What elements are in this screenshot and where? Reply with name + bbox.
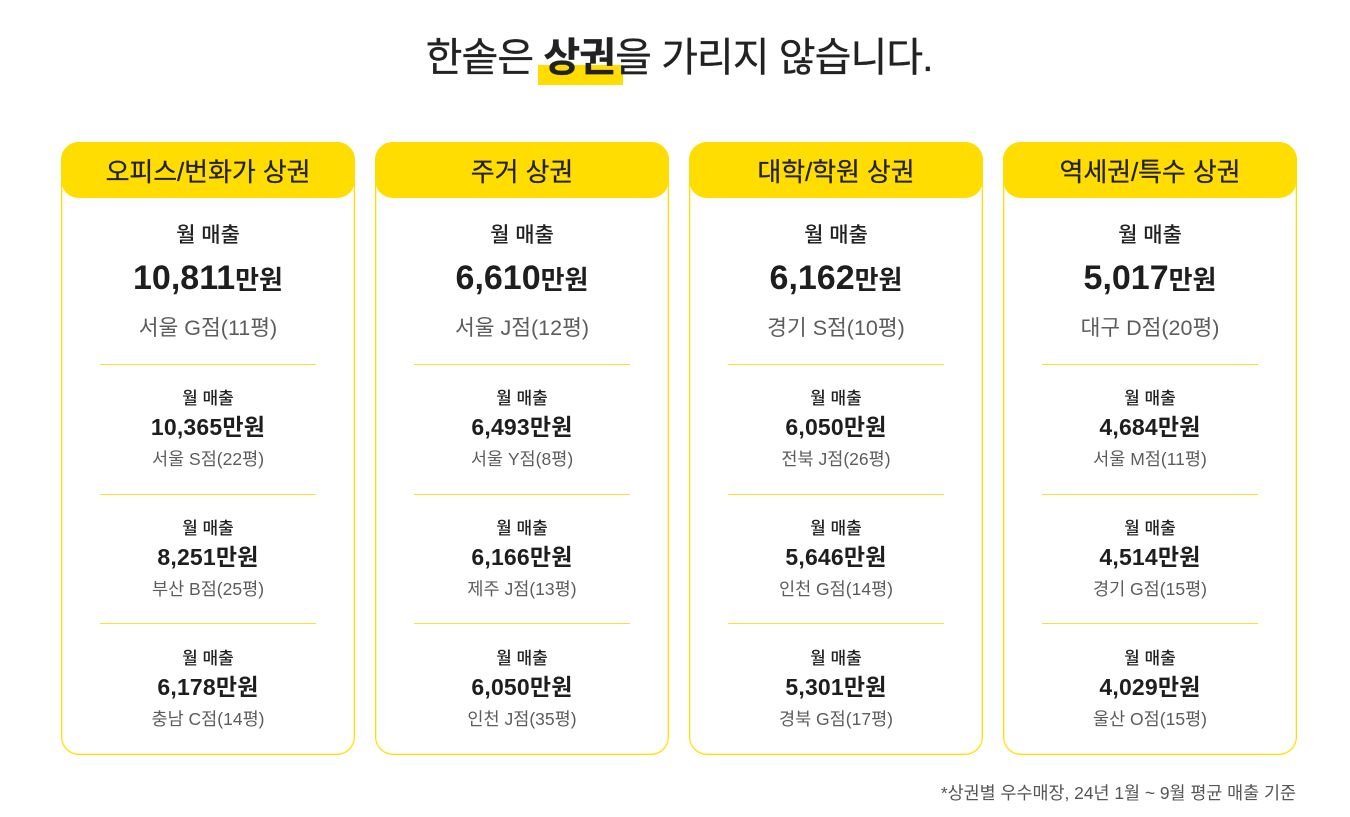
store 3: 인천 G점(14평) [779,579,893,599]
store 4: 인천 J점(35평) [467,709,577,729]
store 2: 월 매출 [810,389,862,408]
store 3: 제주 J점(13평) [467,579,577,599]
store 2: 6,493만원 [471,414,573,440]
title highlight [538,65,623,85]
store 4: 월 매출 [1124,649,1176,668]
panel heading: 대학/학원 상권 [757,157,915,187]
top store: 5,017만원 [1084,259,1216,297]
store 3 [152,519,264,599]
store 3 [779,519,893,599]
top store: 경기 S점(10평) [767,316,905,340]
store 3: 경기 G점(15평) [1093,579,1207,599]
store 3: 5,646만원 [785,544,887,570]
store 4 [779,649,893,729]
panel heading [689,142,983,198]
top store [1081,224,1219,340]
panel: residential district [375,142,669,755]
footnote: *상권별 우수매장, 24년 1월 ~ 9월 평균 매출 기준 [941,783,1296,803]
store 2 [151,389,265,469]
panel heading [1003,142,1297,198]
store 4: 월 매출 [182,649,234,668]
store 3: 부산 B점(25평) [152,579,264,599]
top store [455,224,589,340]
panel heading: 주거 상권 [471,157,573,187]
store 3: 4,514만원 [1099,544,1201,570]
store 2 [471,389,573,469]
store 4 [1093,649,1207,729]
store 2 [1093,389,1207,469]
store 2: 6,050만원 [785,414,887,440]
top store: 월 매출 [176,224,240,247]
store 4: 4,029만원 [1099,674,1201,700]
store 4: 6,178만원 [157,674,259,700]
store 4: 울산 O점(15평) [1093,709,1207,729]
store 4: 5,301만원 [785,674,887,700]
store 2: 서울 Y점(8평) [471,449,573,469]
top store: 대구 D점(20평) [1081,316,1219,340]
store 4 [151,649,265,729]
store 3 [1093,519,1207,599]
panel heading [61,142,355,198]
store 3: 월 매출 [1124,519,1176,538]
store 2: 10,365만원 [151,414,265,440]
panel heading [375,142,669,198]
store 4: 월 매출 [496,649,548,668]
title: 한솥은 상권을 가리지 않습니다. [426,36,932,80]
panel heading: 오피스/번화가 상권 [106,157,310,187]
top store: 6,610만원 [456,259,588,297]
store 2: 전북 J점(26평) [781,449,891,469]
store 4: 충남 C점(14평) [151,709,265,729]
store 4: 월 매출 [810,649,862,668]
store 2 [781,389,891,469]
top store [767,224,905,340]
store 4 [467,649,577,729]
store 2: 서울 S점(22평) [152,449,264,469]
store 2: 서울 M점(11평) [1093,449,1207,469]
store 2: 월 매출 [1124,389,1176,408]
panel: office / entertainment district [61,142,355,755]
store 2: 월 매출 [496,389,548,408]
panel: university / academy district [689,142,983,755]
store 3: 월 매출 [496,519,548,538]
top store: 서울 G점(11평) [139,316,277,340]
store 3: 8,251만원 [157,544,259,570]
panel: station / special district [1003,142,1297,755]
top store: 6,162만원 [770,259,902,297]
store 2: 4,684만원 [1099,414,1201,440]
store 3: 월 매출 [810,519,862,538]
store 3 [467,519,577,599]
top store: 10,811만원 [133,259,283,297]
top store: 서울 J점(12평) [455,316,589,340]
store 3: 6,166만원 [471,544,573,570]
panel heading: 역세권/특수 상권 [1060,157,1240,187]
top store: 월 매출 [490,224,554,247]
store 4: 경북 G점(17평) [779,709,893,729]
top store: 월 매출 [804,224,868,247]
store 2: 월 매출 [182,389,234,408]
store 4: 6,050만원 [471,674,573,700]
top store: 월 매출 [1118,224,1182,247]
top store [133,224,283,340]
store 3: 월 매출 [182,519,234,538]
